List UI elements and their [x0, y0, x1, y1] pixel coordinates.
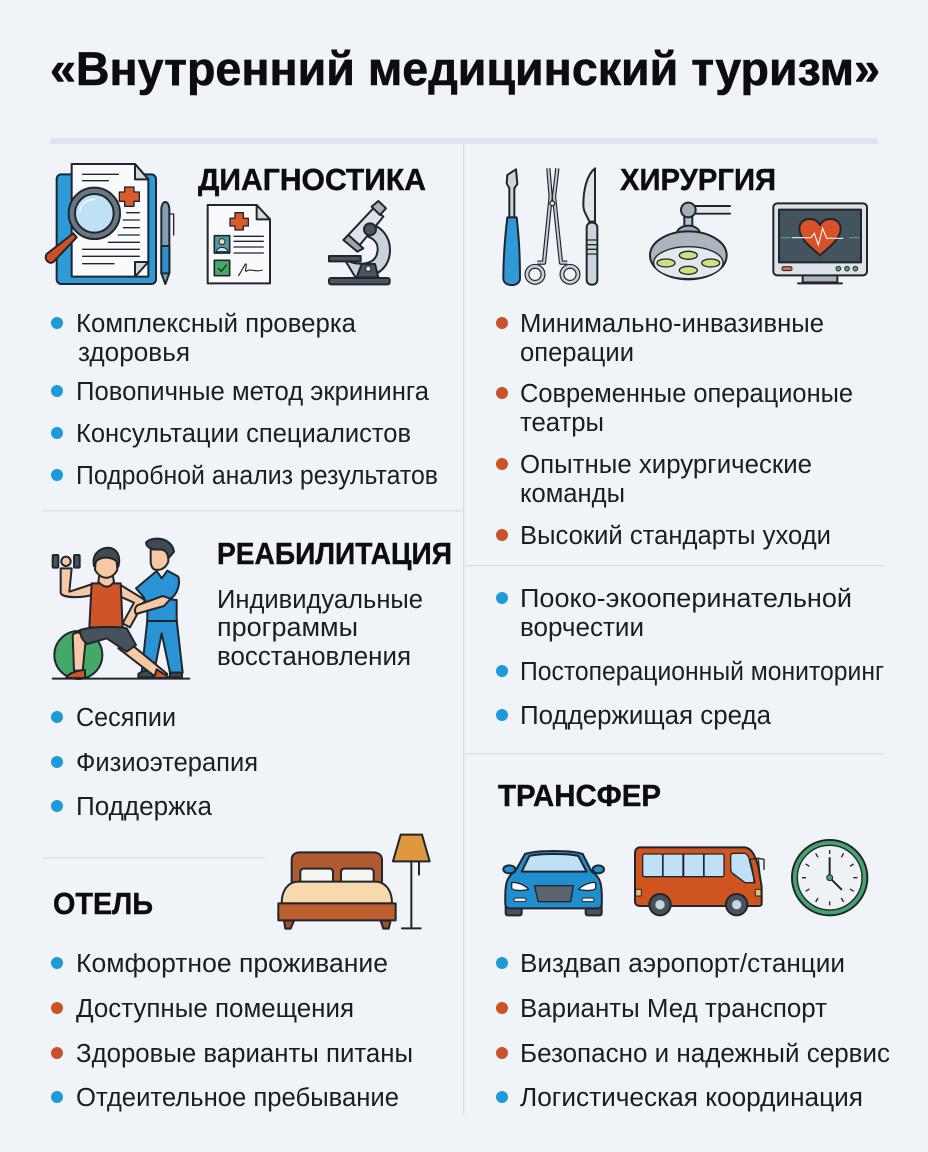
transfer list: [496, 950, 890, 1112]
rehabilitation list: Поддержка: [76, 793, 213, 821]
perioperative care list: Поддержищая среда: [520, 702, 772, 730]
icon: pen: [161, 202, 174, 284]
rehabilitation description: [217, 586, 423, 671]
therapist arm: [135, 596, 171, 614]
surgery list: Минимально-инвазивные: [520, 310, 824, 338]
hotel list: Здоровые варианты питаны: [76, 1040, 413, 1068]
heading: transfer: ТРАНСФЕР: [498, 778, 661, 813]
dumbbell: [53, 555, 80, 568]
transfer list: Безопасно и надежный сервис: [520, 1040, 890, 1068]
rehabilitation list: [51, 704, 258, 821]
diagnostics list: Повопичные метод экрининга: [76, 378, 430, 406]
hotel list: Доступные помещения: [76, 995, 354, 1023]
perioperative care list: Постоперационный мониторинг: [520, 658, 884, 686]
transfer list: Варианты Мед транспорт: [520, 995, 827, 1023]
surgery list: Высокий стандарты уходи: [520, 522, 831, 550]
rehabilitation description: восстановления: [217, 643, 411, 671]
icon: medical form: [208, 205, 270, 283]
icon: surgical instruments: [503, 168, 597, 285]
diagnostics list: Подробной анализ результатов: [76, 462, 438, 490]
icon: heart monitor: [773, 203, 867, 283]
icon: clock: [792, 840, 867, 915]
surgery list: театры: [520, 409, 604, 437]
icon: surgical lamp: [650, 203, 730, 279]
hotel list: [51, 950, 413, 1112]
rehabilitation list: Физиоэтерапия: [76, 749, 258, 777]
surgery list: команды: [520, 480, 625, 508]
heading: rehabilitation: РЕАБИЛИТАЦИЯ: [217, 536, 452, 571]
surgery list: Опытные хирургические: [520, 451, 812, 479]
perioperative care list: Пооко-экооперинательной: [520, 585, 852, 613]
icon: microscope: [329, 201, 390, 284]
hotel list: Комфортное проживание: [76, 950, 388, 978]
panel: diagnostics: [46, 162, 438, 490]
rehabilitation list: Сесяпии: [76, 704, 176, 732]
heading: hotel: ОТЕЛЬ: [53, 886, 153, 921]
panel: surgery: [496, 162, 884, 730]
icon: bed and floor lamp: [278, 835, 430, 929]
icon: bus: [635, 847, 764, 915]
title: «Внутренний медицинский туризм»: [50, 42, 880, 95]
icon: therapist and patient: [53, 539, 189, 679]
diagnostics list: здоровья: [78, 339, 190, 367]
perioperative care list: ворчестии: [520, 614, 644, 642]
icon: folder with document and magnifier: [46, 164, 174, 284]
panel: transfer: [496, 778, 890, 1112]
heading: diagnostics: ДИАГНОСТИКА: [198, 162, 426, 197]
panel: rehabilitation: [51, 536, 452, 821]
diagnostics list: Комплексный проверка: [76, 310, 357, 338]
surgery list: [496, 310, 853, 550]
transfer list: Логистическая координация: [520, 1084, 863, 1112]
heading: surgery: ХИРУРГИЯ: [620, 162, 776, 197]
icon: car: [503, 851, 604, 915]
hotel list: Отдеительное пребывание: [76, 1084, 399, 1112]
diagnostics list: [51, 310, 438, 490]
transfer list: Виздвап аэропорт/станции: [520, 950, 845, 978]
perioperative care list: [496, 585, 884, 730]
therapist: [136, 539, 183, 677]
rehabilitation description: программы: [217, 614, 358, 642]
panel: hotel: [51, 835, 430, 1112]
surgery list: операции: [520, 339, 634, 367]
diagnostics list: Консультации специалистов: [76, 420, 411, 448]
surgery list: Современные операционые: [520, 380, 853, 408]
patient: [61, 548, 168, 678]
rehabilitation description: Индивидуальные: [217, 586, 423, 614]
